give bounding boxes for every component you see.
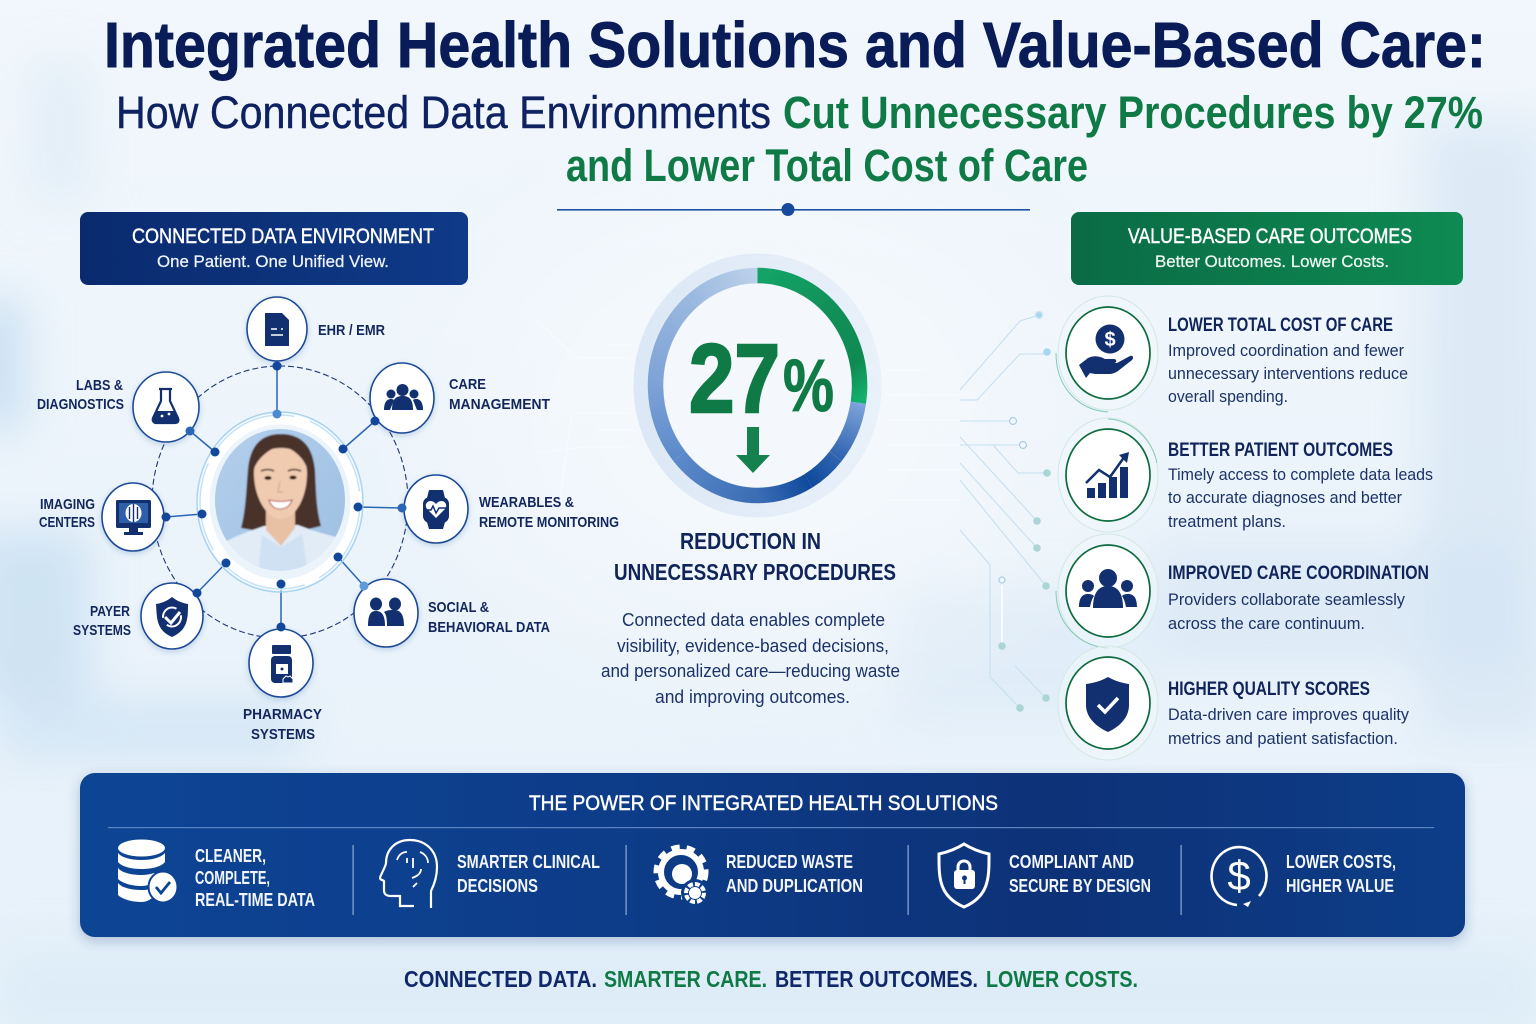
callout: reduction in unnecessary procedures xyxy=(601,528,900,707)
source node: EHR / EMR: EHR / EMR xyxy=(318,322,385,339)
connector spokes xyxy=(166,366,402,627)
source node: pharmacy systems: SYSTEMS xyxy=(251,726,315,743)
item: reduced waste and duplication xyxy=(657,848,863,907)
source node: wearables and remote monitoring xyxy=(398,475,619,543)
icon: rising bar chart xyxy=(1086,452,1129,498)
gauge: 27% reduction xyxy=(634,254,882,518)
tagline: CONNECTED DATA. xyxy=(404,966,597,992)
item: reduced waste and duplication: REDUCED WASTE xyxy=(726,852,853,872)
icon: down arrow xyxy=(736,427,770,473)
item: reduced waste and duplication: AND DUPLICATION xyxy=(726,876,863,896)
circuit lines: left of gauge xyxy=(537,320,636,500)
outcome: lower total cost of care xyxy=(1056,296,1408,412)
outcome: lower total cost of care: overall spending. xyxy=(1168,387,1288,406)
outcome: better patient outcomes: to accurate diagnoses and better xyxy=(1168,488,1402,507)
tagline: SMARTER CARE. xyxy=(604,966,767,992)
panel heading: THE POWER OF INTEGRATED HEALTH SOLUTIONS xyxy=(529,792,998,815)
item: cleaner data: REAL-TIME DATA xyxy=(195,890,315,910)
outcome: improved care coordination: Providers collaborate seamlessly xyxy=(1168,590,1405,609)
icon: care team xyxy=(1079,569,1137,608)
source node: care management: CARE xyxy=(449,376,486,393)
outcome: better patient outcomes: Timely access to complete data leads xyxy=(1168,465,1433,484)
header: value-based care outcomes: Better Outcomes. Lower Costs. xyxy=(1155,252,1389,271)
tagline: LOWER COSTS. xyxy=(986,966,1138,992)
item: compliant and secure by design xyxy=(939,844,1151,907)
callout: reduction in unnecessary procedures: REDUCTION IN xyxy=(680,528,821,554)
outcome: higher quality scores: metrics and patient satisfaction. xyxy=(1168,729,1398,748)
icon: hand with dollar coin xyxy=(1079,324,1133,378)
title divider xyxy=(557,203,1030,216)
gauge value: 27 xyxy=(689,324,780,433)
outcome: lower total cost of care: LOWER TOTAL COST OF CARE xyxy=(1168,315,1393,336)
item: lower costs, higher value: HIGHER VALUE xyxy=(1286,876,1394,896)
outcome: improved care coordination xyxy=(1056,534,1429,648)
source node: imaging centers: IMAGING xyxy=(40,496,95,513)
source node: social and behavioral data: SOCIAL & xyxy=(428,599,489,616)
outcome: higher quality scores: Data-driven care improves quality xyxy=(1168,705,1409,724)
portrait: patient xyxy=(215,429,345,571)
outcome: improved care coordination: IMPROVED CARE COORDINATION xyxy=(1168,563,1429,584)
title: How Connected Data Environments xyxy=(116,87,771,138)
source node: payer systems: PAYER xyxy=(90,603,130,620)
source node: pharmacy systems xyxy=(243,622,322,743)
title: and Lower Total Cost of Care xyxy=(566,140,1088,191)
icon: shield check xyxy=(1086,677,1129,732)
item: cleaner data xyxy=(118,840,315,910)
outcome: lower total cost of care: Improved coordination and fewer xyxy=(1168,341,1404,360)
source node: payer systems: SYSTEMS xyxy=(73,622,131,639)
item: smarter clinical decisions xyxy=(380,840,600,908)
source node: social and behavioral data: BEHAVIORAL DATA xyxy=(428,619,550,636)
gauge: 27% reduction: % xyxy=(783,344,834,427)
item: lower costs, higher value xyxy=(1212,847,1396,907)
source node: labs and diagnostics xyxy=(37,372,199,442)
icon: hand with dollar coin: $ xyxy=(1104,329,1116,351)
source node: wearables and remote monitoring: REMOTE MONITORING xyxy=(479,514,619,531)
outcome: higher quality scores: HIGHER QUALITY SCORES xyxy=(1168,679,1370,700)
source node: EHR / EMR xyxy=(247,297,385,370)
header: connected data environment: CONNECTED DATA ENVIRONMENT xyxy=(132,225,434,248)
item: lower costs, higher value: $ xyxy=(1227,852,1251,899)
dashed ring connecting sources xyxy=(152,366,408,638)
source node: care management xyxy=(370,363,550,433)
source node: imaging centers xyxy=(39,483,170,551)
tagline xyxy=(404,966,1138,992)
outcome: better patient outcomes xyxy=(1058,418,1433,532)
outcome: improved care coordination: across the care continuum. xyxy=(1168,614,1365,633)
item: lower costs, higher value: LOWER COSTS, xyxy=(1286,852,1396,872)
tagline: BETTER OUTCOMES. xyxy=(775,966,978,992)
item: smarter clinical decisions: SMARTER CLINICAL xyxy=(457,852,600,872)
outcome: better patient outcomes: BETTER PATIENT OUTCOMES xyxy=(1168,440,1393,461)
item: cleaner data: CLEANER, xyxy=(195,846,266,866)
source node: labs and diagnostics: LABS & xyxy=(76,377,123,394)
source node: social and behavioral data xyxy=(354,579,550,647)
outcome: higher quality scores xyxy=(1058,646,1409,760)
connector dots xyxy=(198,362,362,588)
header: connected data environment: One Patient. One Unified View. xyxy=(157,252,389,271)
callout: reduction in unnecessary procedures: and personalized care—reducing waste xyxy=(601,661,900,681)
item: compliant and secure by design: SECURE BY DESIGN xyxy=(1009,876,1151,896)
source node: payer systems xyxy=(73,583,203,649)
panel: connected data hub xyxy=(37,297,619,743)
outcome: better patient outcomes: treatment plans. xyxy=(1168,512,1286,531)
header: value-based care outcomes: VALUE-BASED CARE OUTCOMES xyxy=(1128,225,1412,248)
header: value-based care outcomes xyxy=(1071,212,1463,285)
source node: wearables and remote monitoring: WEARABLES & xyxy=(479,494,574,511)
source node: care management: MANAGEMENT xyxy=(449,396,550,413)
callout: reduction in unnecessary procedures: Connected data enables complete xyxy=(622,610,885,630)
panel: the power of integrated health solutions xyxy=(80,773,1465,937)
callout: reduction in unnecessary procedures: UNNECESSARY PROCEDURES xyxy=(614,559,896,585)
source node: pharmacy systems: PHARMACY xyxy=(243,706,322,723)
title xyxy=(104,9,1486,191)
portrait rings xyxy=(197,412,363,592)
header: connected data environment xyxy=(80,212,468,285)
callout: reduction in unnecessary procedures: visibility, evidence-based decisions, xyxy=(617,636,889,656)
source node: imaging centers: CENTERS xyxy=(39,514,95,531)
source node: labs and diagnostics: DIAGNOSTICS xyxy=(37,396,124,413)
circuit lines: right of gauge xyxy=(886,312,1051,712)
outcome: lower total cost of care: unnecessary interventions reduce xyxy=(1168,364,1408,383)
item: cleaner data: COMPLETE, xyxy=(195,868,270,888)
callout: reduction in unnecessary procedures: and improving outcomes. xyxy=(655,687,850,707)
item: smarter clinical decisions: DECISIONS xyxy=(457,876,538,896)
item: compliant and secure by design: COMPLIANT AND xyxy=(1009,852,1134,872)
